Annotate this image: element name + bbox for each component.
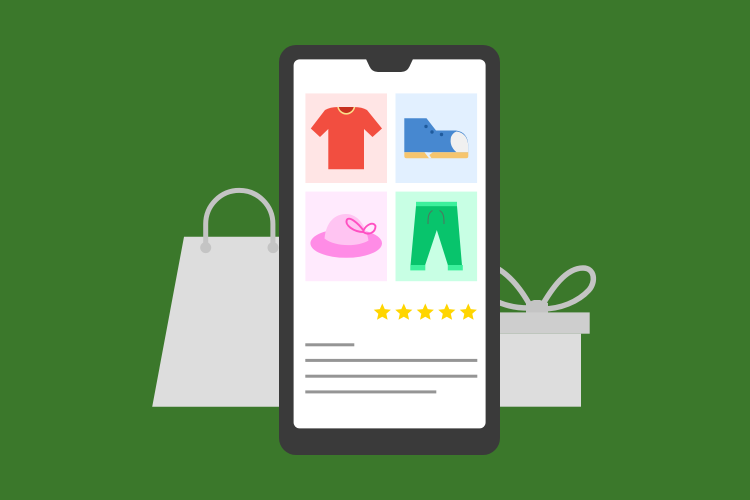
product tiles xyxy=(305,93,477,281)
product tile: trousers xyxy=(396,192,477,281)
phone screen xyxy=(294,59,486,428)
icon: gift box xyxy=(490,267,593,407)
icon: hat xyxy=(310,214,382,258)
product tile: t-shirt xyxy=(305,93,387,183)
icon: shopping bag xyxy=(152,190,300,407)
product tile: boot xyxy=(396,93,477,183)
phone body xyxy=(279,45,500,455)
description text lines xyxy=(305,343,477,393)
icon: t-shirt xyxy=(311,107,382,169)
phone notch xyxy=(366,59,413,72)
rating stars xyxy=(374,304,477,320)
icon: trousers xyxy=(410,202,463,270)
icon: boot xyxy=(404,118,468,158)
product tile: hat xyxy=(305,192,387,281)
phone xyxy=(279,45,500,455)
